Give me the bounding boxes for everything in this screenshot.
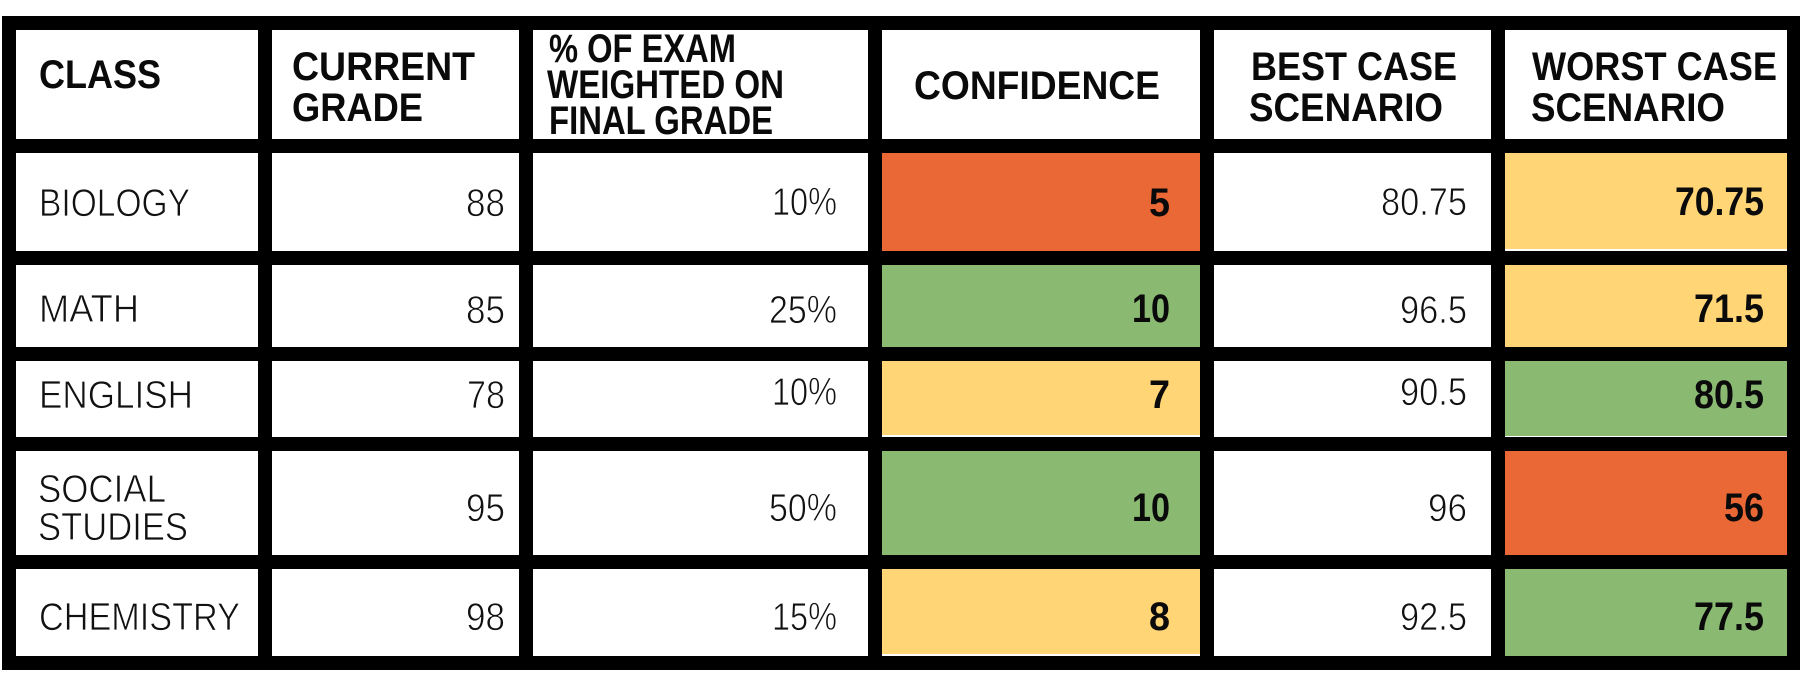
class name: SOCIAL xyxy=(38,468,166,511)
worst case: 70.75 xyxy=(1675,180,1764,224)
best case: 80.75 xyxy=(1381,181,1467,224)
heading: worst case scenario xyxy=(1531,45,1777,130)
heading: current grade xyxy=(292,45,475,130)
confidence: 5 xyxy=(1149,181,1170,225)
current grade: 98 xyxy=(466,596,505,639)
heading: class: CLASS xyxy=(39,53,161,97)
exam weight: 10% xyxy=(772,371,837,414)
confidence: 10 xyxy=(1132,486,1170,530)
row: biology xyxy=(16,153,1787,251)
current grade: 95 xyxy=(466,487,505,530)
heading: current grade: GRADE xyxy=(292,86,423,130)
heading: best case scenario: SCENARIO xyxy=(1249,86,1443,130)
confidence: 8 xyxy=(1149,595,1170,639)
best case: 92.5 xyxy=(1400,596,1467,639)
worst case: 56 xyxy=(1724,486,1764,530)
confidence: 10 xyxy=(1132,287,1170,331)
heading: percent of exam weighted on final grade: % OF EXAM xyxy=(549,27,736,71)
class name: BIOLOGY xyxy=(39,182,190,225)
best case: 90.5 xyxy=(1400,371,1467,414)
header row xyxy=(16,27,1787,143)
heading: best case scenario: BEST CASE xyxy=(1251,45,1457,89)
exam weight: 10% xyxy=(772,181,837,224)
current grade: 78 xyxy=(467,374,505,417)
heading: confidence: CONFIDENCE xyxy=(914,64,1160,108)
current grade: 85 xyxy=(466,289,505,332)
heading: current grade: CURRENT xyxy=(292,45,475,89)
class name: MATH xyxy=(39,288,139,331)
worst case: 77.5 xyxy=(1694,595,1764,639)
exam weight: 15% xyxy=(772,596,837,639)
heading: worst case scenario: WORST CASE xyxy=(1532,45,1777,89)
confidence: 7 xyxy=(1149,373,1170,417)
worst case: 80.5 xyxy=(1694,373,1764,417)
heading: worst case scenario: SCENARIO xyxy=(1531,86,1725,130)
row: chemistry xyxy=(16,569,1787,656)
worst case: 71.5 xyxy=(1694,287,1764,331)
exam weight: 50% xyxy=(769,487,837,530)
row: social studies xyxy=(16,451,1787,555)
row: english xyxy=(16,361,1787,437)
best case: 96.5 xyxy=(1400,289,1467,332)
best case: 96 xyxy=(1428,487,1467,530)
heading: percent of exam weighted on final grade: WEIGHTED ON xyxy=(547,63,784,107)
class name: CHEMISTRY xyxy=(39,596,240,639)
heading: percent of exam weighted on final grade xyxy=(547,27,784,143)
exam weight: 25% xyxy=(769,289,837,332)
class name: STUDIES xyxy=(38,506,188,549)
heading: best case scenario xyxy=(1249,45,1457,130)
heading: percent of exam weighted on final grade: FINAL GRADE xyxy=(549,99,773,143)
class name xyxy=(38,468,188,549)
class name: ENGLISH xyxy=(39,374,193,417)
row: math xyxy=(16,265,1787,347)
current grade: 88 xyxy=(466,182,505,225)
